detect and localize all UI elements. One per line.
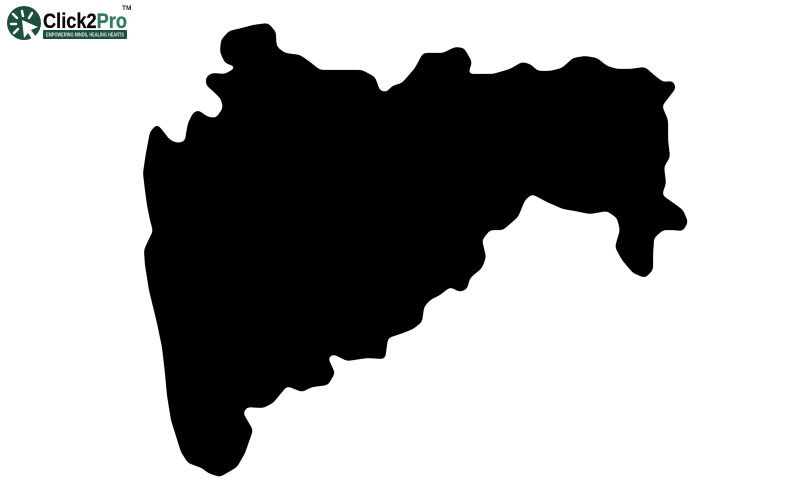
wordmark: Click2Pro — [43, 10, 127, 33]
trademark: TM — [122, 5, 131, 12]
logo: Click2Pro — [7, 5, 131, 40]
tagline banner: EMPOWERING MINDS, HEALING HEARTS — [46, 33, 125, 39]
map: Maharashtra silhouette — [143, 23, 688, 477]
icon: cursor badge — [7, 6, 41, 40]
